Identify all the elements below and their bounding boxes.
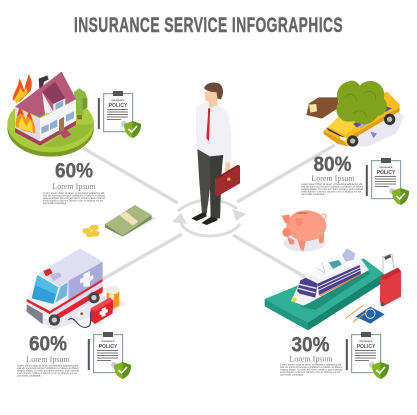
windows and door bbox=[41, 111, 74, 134]
subheading: Lorem Ipsum bbox=[289, 354, 333, 364]
ship hull bbox=[291, 259, 369, 306]
title: INSURANCE SERVICE INFOGRAPHICS bbox=[74, 13, 343, 37]
panel: medical insurance bbox=[17, 248, 131, 379]
description: commodo consequat. bbox=[17, 374, 41, 378]
panel: travel insurance bbox=[265, 248, 405, 379]
tree crown bbox=[336, 81, 387, 124]
description: magna aliqua. Ut enim ad minim veniam, quis nostrud bbox=[17, 368, 80, 372]
passport bbox=[355, 307, 385, 324]
insurance policy icon: INSURANCE bbox=[359, 340, 373, 343]
insurance policy icon: INSURANCE bbox=[101, 340, 115, 343]
description: Lorem ipsum dolor sit amet, consectetur adipiscing elit, bbox=[17, 364, 79, 368]
insurance policy icon: POLICY bbox=[99, 344, 118, 350]
description: sed do eiusmod tempor incididunt ut labore et dolore bbox=[43, 194, 106, 198]
description bbox=[280, 362, 343, 376]
description bbox=[301, 182, 364, 196]
percent: 30% bbox=[292, 334, 330, 356]
insurance policy icon: INSURANCE bbox=[111, 99, 125, 102]
panel: car insurance bbox=[301, 81, 409, 205]
description: Lorem ipsum dolor sit amet, consectetur adipiscing elit, bbox=[301, 182, 363, 186]
subheading: Lorem Ipsum bbox=[311, 174, 355, 183]
percent: 60% bbox=[55, 160, 93, 182]
insurance policy icon bbox=[98, 91, 141, 138]
icon: piggy bank bbox=[282, 210, 326, 252]
percent: 60% bbox=[29, 332, 67, 356]
shirt bbox=[196, 102, 231, 162]
subheading: Lorem Ipsum bbox=[52, 182, 96, 191]
left shoe bbox=[191, 212, 207, 221]
hair bbox=[204, 82, 223, 100]
insurance policy icon: INSURANCE bbox=[379, 166, 393, 169]
insurance policy icon: POLICY bbox=[109, 103, 128, 109]
ambulance with medical kit bbox=[23, 248, 126, 330]
businessman with briefcase bbox=[191, 82, 240, 225]
percent: 80% bbox=[314, 153, 352, 176]
chimney bbox=[39, 75, 49, 89]
briefcase bbox=[215, 165, 240, 196]
subheading: Lorem Ipsum bbox=[26, 355, 70, 364]
insurance policy icon: POLICY bbox=[357, 344, 376, 350]
head bbox=[205, 89, 217, 108]
description: Lorem ipsum dolor sit amet, consectetur adipiscing elit, bbox=[280, 362, 342, 366]
connector lines bbox=[83, 145, 335, 279]
legs bbox=[197, 149, 223, 218]
description: magna aliqua. Ut enim ad minim veniam, quis nostrud bbox=[301, 187, 364, 191]
description: sed do eiusmod tempor incididunt ut labore et dolore bbox=[280, 365, 343, 369]
stethoscope bbox=[68, 312, 91, 327]
description bbox=[17, 364, 80, 378]
insurance policy icon bbox=[88, 332, 131, 379]
roof flames bbox=[13, 74, 32, 102]
medical kit bbox=[91, 298, 113, 324]
description: exercitation ullamco laboris nisi ut aliquip ex ea bbox=[43, 198, 104, 202]
description: Lorem ipsum dolor sit amet, consectetur adipiscing elit, bbox=[43, 191, 105, 195]
icon: banknotes and coins bbox=[82, 205, 157, 237]
right shoe bbox=[201, 217, 217, 225]
description bbox=[43, 191, 106, 205]
description: commodo consequat. bbox=[43, 201, 67, 205]
insurance policy icon: POLICY bbox=[377, 170, 396, 176]
insurance policy icon bbox=[366, 158, 409, 205]
pill bottle bbox=[107, 291, 119, 309]
description: commodo consequat. bbox=[301, 192, 325, 196]
hand bbox=[225, 162, 231, 172]
tree bbox=[74, 88, 87, 119]
description: exercitation ullamco laboris nisi ut aliquip ex ea bbox=[17, 371, 78, 375]
description: exercitation ullamco laboris nisi ut aliquip ex ea bbox=[301, 190, 362, 194]
tie bbox=[206, 108, 210, 141]
tree trunk bbox=[306, 97, 339, 119]
description: commodo consequat. bbox=[280, 372, 304, 376]
description: exercitation ullamco laboris nisi ut aliquip ex ea bbox=[280, 370, 341, 374]
description: magna aliqua. Ut enim ad minim veniam, quis nostrud bbox=[280, 368, 343, 372]
roof bbox=[15, 72, 76, 117]
insurance policy icon bbox=[346, 332, 389, 379]
cruise ship on water with luggage bbox=[265, 248, 405, 330]
house on green platform bbox=[7, 72, 94, 157]
suitcase bbox=[377, 293, 405, 307]
panel: home insurance bbox=[7, 72, 141, 205]
description: sed do eiusmod tempor incididunt ut labore et dolore bbox=[17, 366, 80, 370]
car hit by fallen tree bbox=[306, 81, 404, 147]
description: magna aliqua. Ut enim ad minim veniam, quis nostrud bbox=[43, 196, 106, 200]
window flames bbox=[16, 106, 35, 133]
description: sed do eiusmod tempor incididunt ut labore et dolore bbox=[301, 184, 364, 188]
cycle arrows circle bbox=[172, 200, 246, 236]
